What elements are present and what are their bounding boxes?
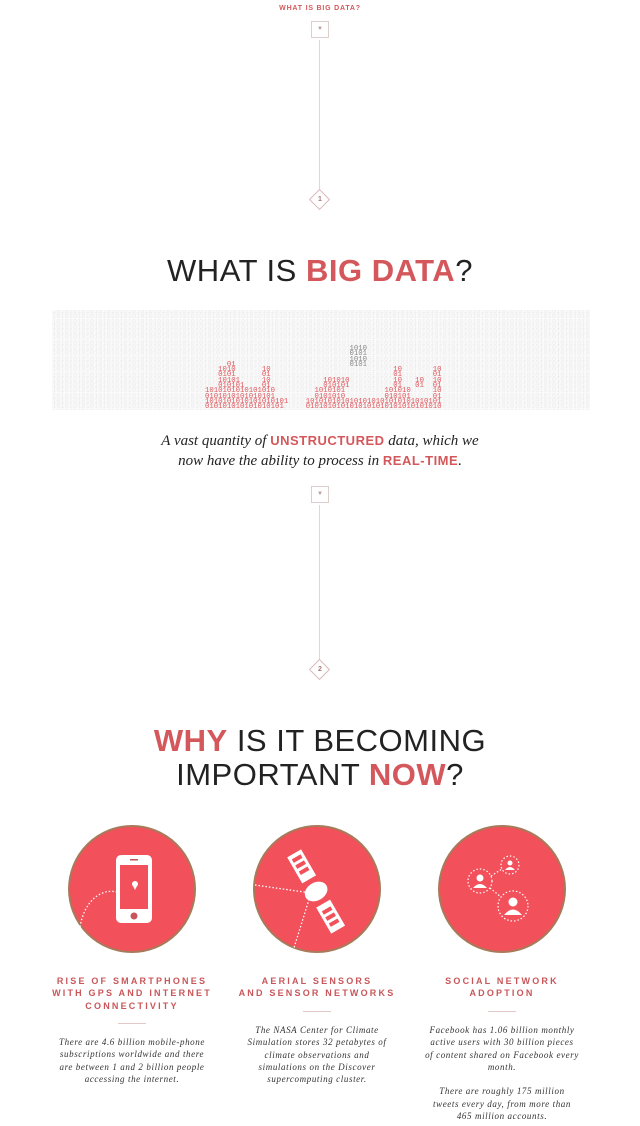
title: why now	[154, 723, 486, 792]
text: active users with 30 billion pieces	[430, 1037, 574, 1047]
caption: now have the ability to process in REAL-TIME.	[178, 453, 462, 469]
text	[425, 1025, 579, 1121]
heading	[445, 976, 559, 998]
heading: CONNECTIVITY	[85, 1001, 179, 1011]
heading: RISE OF SMARTPHONES	[57, 976, 207, 986]
icon: satellite	[253, 825, 381, 953]
panel: social	[425, 825, 579, 1121]
title: why now: IMPORTANT NOW?	[176, 757, 464, 792]
panel: sensors	[238, 825, 395, 1084]
title: why now: WHY IS IT BECOMING	[154, 723, 486, 758]
text: are between 1 and 2 billion people	[59, 1062, 205, 1072]
text: There are 4.6 billion mobile-phone	[59, 1037, 205, 1047]
heading: SOCIAL NETWORK	[445, 976, 559, 986]
title: what is big data: WHAT IS BIG DATA?	[167, 253, 473, 288]
text: Simulation stores 32 petabytes of	[248, 1037, 386, 1047]
text: simulations on the Discover	[259, 1062, 375, 1072]
marker 2	[309, 659, 330, 680]
text: Facebook has 1.06 billion monthly	[429, 1025, 575, 1035]
text: accessing the internet.	[85, 1074, 179, 1084]
heading: AERIAL SENSORS	[262, 976, 372, 986]
icon: social network	[438, 825, 566, 953]
text: month.	[488, 1062, 516, 1072]
nav box 1	[311, 21, 329, 38]
nav box 2	[311, 486, 329, 503]
heading	[52, 976, 212, 1011]
text: subscriptions worldwide and there	[60, 1049, 204, 1059]
caption: A vast quantity of UNSTRUCTURED data, which we	[161, 433, 479, 449]
marker 1	[309, 189, 330, 210]
icon: smartphone	[68, 825, 196, 953]
text	[59, 1037, 205, 1084]
heading: WITH GPS AND INTERNET	[52, 988, 212, 998]
text: 465 million accounts.	[457, 1111, 547, 1121]
text: The NASA Center for Climate	[255, 1025, 379, 1035]
nav box 2: ▼	[317, 491, 323, 497]
text: There are roughly 175 million	[439, 1086, 565, 1096]
heading: ADOPTION	[469, 988, 535, 998]
marker 2: 2	[318, 666, 322, 673]
text: tweets every day, from more than	[433, 1099, 571, 1109]
text: climate observations and	[265, 1050, 369, 1060]
nav box 1: ▼	[317, 26, 323, 32]
text: supercomputing cluster.	[267, 1074, 367, 1084]
top label: WHAT IS BIG DATA?	[279, 5, 361, 12]
panel: smartphones	[52, 825, 212, 1084]
text	[248, 1025, 387, 1084]
caption	[160, 433, 479, 469]
marker 1: 1	[318, 196, 322, 203]
heading: AND SENSOR NETWORKS	[239, 988, 395, 998]
text: of content shared on Facebook every	[425, 1050, 579, 1060]
binary chart: 1010 0101 1010 01 0101 1010 10 10 10 0101 01 01 01 10101 10 101010 10 10 10 010101 01 010101 01 01 01 1010101010101010 1010101 101010 10 0101010101010101 0101010 010101 01 1010101010101010101 1010101010101010101010101010101 010101010101010101 0101010101010101010101010101010	[205, 345, 441, 411]
heading	[238, 976, 395, 998]
